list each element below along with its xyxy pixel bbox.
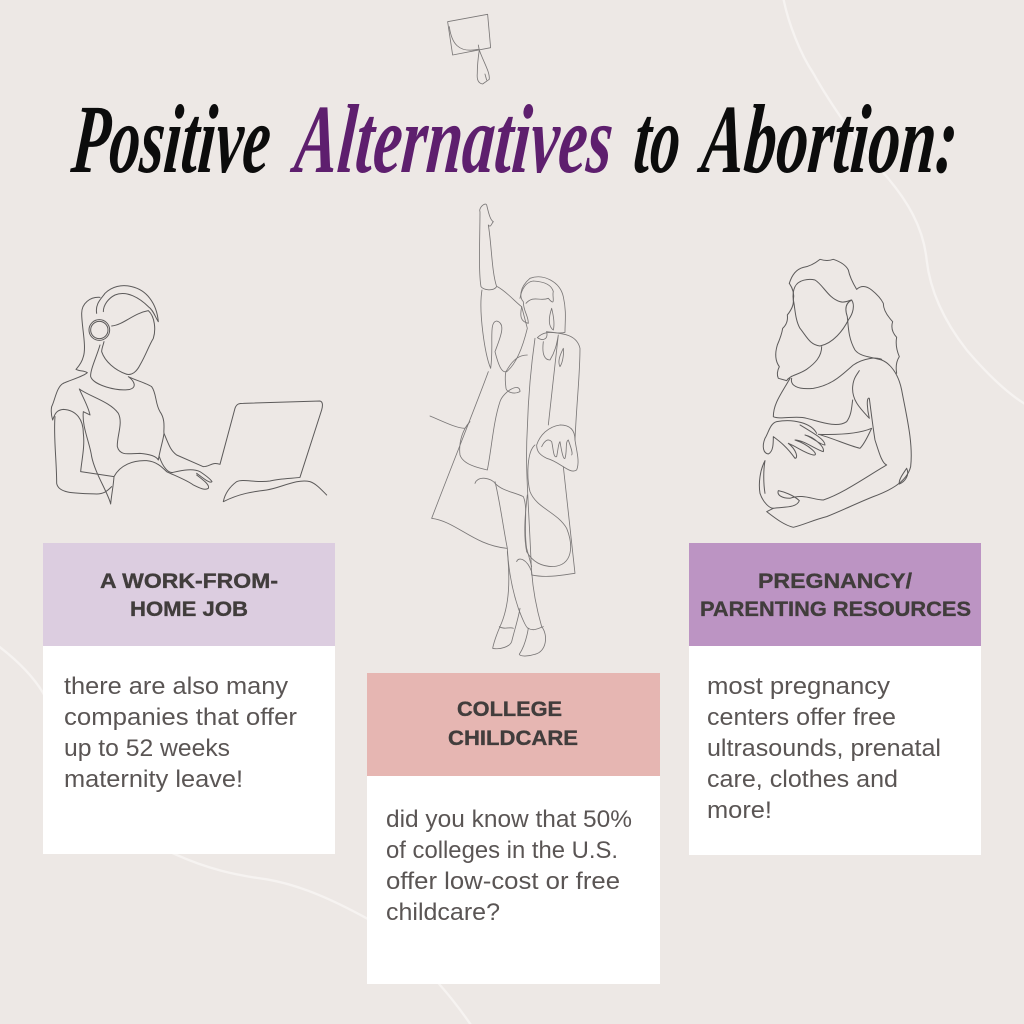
illustration: woman with headset at laptop — [51, 286, 327, 504]
text: pregnancy resources body — [707, 673, 941, 824]
text: pregnancy resources body: most pregnancy — [707, 673, 890, 700]
heading: college childcare: COLLEGE — [457, 698, 562, 721]
text: pregnancy resources body: more! — [707, 797, 772, 824]
title: Alternatives — [287, 86, 617, 194]
text: work-from-home body: maternity leave! — [64, 766, 243, 793]
heading: work-from-home job: A WORK-FROM- — [100, 570, 278, 593]
text: college childcare body: offer low-cost or free — [386, 868, 620, 895]
text: pregnancy resources body: care, clothes and — [707, 766, 898, 793]
heading: work-from-home job: HOME JOB — [130, 598, 248, 621]
illustration: pregnant woman cradling belly — [759, 259, 911, 527]
icon: graduation cap — [448, 14, 491, 84]
title — [67, 86, 962, 194]
text: work-from-home body: there are also many — [64, 673, 288, 700]
panel: pregnancy and parenting resources — [689, 543, 981, 855]
heading: college childcare — [448, 698, 578, 750]
text: work-from-home body: up to 52 weeks — [64, 735, 230, 762]
title: Positive — [67, 86, 275, 194]
heading: college childcare: CHILDCARE — [448, 727, 578, 750]
heading: pregnancy and parenting resources — [700, 570, 971, 621]
text: college childcare body: childcare? — [386, 899, 500, 926]
heading: pregnancy and parenting resources: PARENTING RESOURCES — [700, 598, 971, 621]
text: work-from-home body: companies that offer — [64, 704, 297, 731]
panel: work-from-home job — [43, 543, 335, 854]
text: college childcare body: did you know that 50% — [386, 806, 632, 833]
text: college childcare body: of colleges in the U.S. — [386, 837, 618, 864]
panel: college childcare — [367, 673, 660, 984]
text: work-from-home body — [64, 673, 297, 793]
title: to — [630, 86, 685, 194]
heading: pregnancy and parenting resources: PREGNANCY/ — [758, 570, 912, 593]
text: college childcare body — [386, 806, 632, 926]
text: pregnancy resources body: ultrasounds, prenatal — [707, 735, 941, 762]
illustration: graduate woman with raised arm — [430, 204, 580, 656]
text: pregnancy resources body: centers offer free — [707, 704, 896, 731]
heading: work-from-home job — [100, 570, 278, 621]
